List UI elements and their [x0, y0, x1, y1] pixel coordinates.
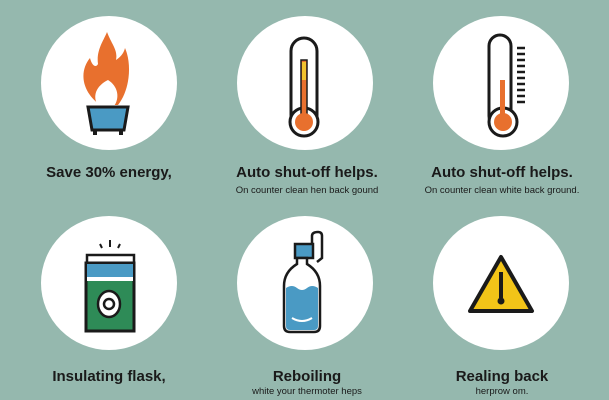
subtitle 1: On counter clean hen back gound	[236, 185, 378, 196]
circle: bottle	[237, 216, 373, 350]
icon: flame	[83, 32, 129, 135]
icon: bottle	[284, 232, 322, 332]
icon: thermometer 1	[290, 38, 318, 136]
circle: flame	[41, 16, 177, 150]
circle: warning	[433, 216, 569, 350]
title: insulating flask: Insulating flask,	[52, 368, 166, 385]
title: auto shut-off 1: Auto shut-off helps.	[236, 164, 378, 181]
subtitle 4: herprow om.	[476, 386, 528, 397]
icon: warning	[470, 257, 532, 311]
icon: thermometer 2	[489, 35, 525, 136]
title: reboiling: Reboiling	[273, 368, 341, 385]
circle: flask	[41, 216, 177, 350]
title: auto shut-off 2: Auto shut-off helps.	[431, 164, 573, 181]
circle: thermometer 1	[237, 16, 373, 150]
title: save energy: Save 30% energy,	[46, 164, 172, 181]
circle: thermometer 2	[433, 16, 569, 150]
subtitle 2: On counter clean white back ground.	[425, 185, 579, 196]
title: realing back: Realing back	[456, 368, 548, 385]
subtitle 3: white your thermoter heps	[252, 386, 362, 397]
icon: flask	[86, 240, 134, 331]
